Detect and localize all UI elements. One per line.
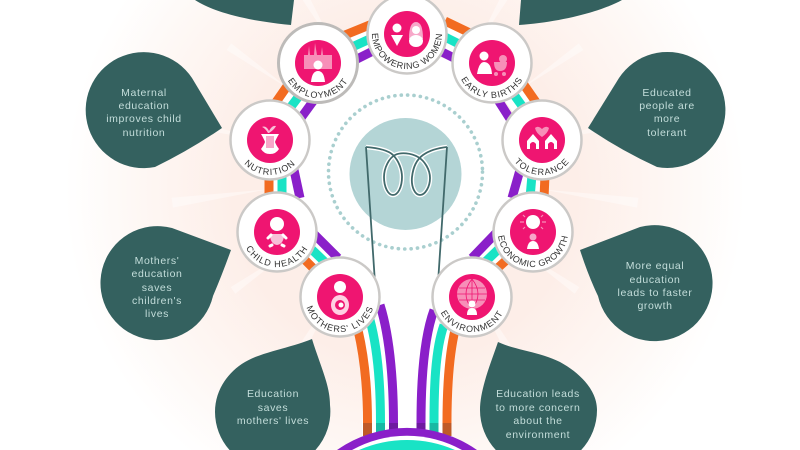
icon: coin and person: [520, 215, 546, 249]
callout: faster growth: growth: [637, 300, 673, 312]
callout: faster growth: [580, 225, 713, 341]
dotted ring: [328, 95, 482, 249]
icon: pregnant mother: [331, 281, 349, 315]
node: tolerance: TOLERANCE: [516, 158, 569, 175]
callout: child nutrition: nutrition: [123, 127, 165, 139]
callout: child nutrition: education: [119, 100, 169, 112]
callout: saves mothers: Education: [247, 388, 299, 400]
callout: environment: to more concern: [496, 402, 580, 414]
node: empowering women: EMPOWERING WOMEN: [372, 34, 442, 70]
node: early births: [451, 22, 533, 104]
callout: tolerant: Educated: [642, 87, 692, 99]
node: early births: EARLY BIRTHS: [461, 76, 522, 98]
stems: [358, 305, 455, 436]
icon: women: [391, 22, 423, 47]
node: empowering women: [366, 0, 448, 75]
callout: saves children: children's: [132, 295, 182, 307]
callout: top right (cropped): [519, 0, 622, 25]
callout: saves children: Mothers': [135, 255, 179, 267]
icon: globe and person: [457, 279, 487, 315]
ribbon connectors between nodes: [269, 21, 545, 275]
callout: tolerant: more: [654, 113, 680, 125]
callout: faster growth: leads to faster: [618, 287, 692, 299]
callout: tolerant: [588, 52, 725, 168]
callout: saves children: lives: [145, 308, 169, 320]
node: nutrition: NUTRITION: [244, 160, 295, 175]
filament wires: [366, 147, 447, 283]
callout: saves children: [100, 226, 231, 340]
callout: environment: Education leads: [496, 388, 580, 400]
node: environment: [431, 256, 513, 338]
callout: saves children: education: [132, 268, 182, 280]
icon: houses and heart: [527, 127, 557, 149]
callout: child nutrition: [86, 52, 222, 168]
node: mothers' lives: [299, 256, 381, 338]
callout: tolerant: people are: [639, 100, 695, 112]
callout: saves mothers: mothers' lives: [237, 415, 309, 427]
node: mothers' lives: MOTHERS' LIVES: [306, 306, 372, 332]
icon: factory and worker: [304, 43, 332, 82]
node: nutrition: [229, 99, 311, 181]
base dome: [337, 428, 477, 450]
callout: faster growth: education: [630, 274, 680, 286]
node: child health: [236, 191, 318, 273]
callout: saves children: saves: [142, 282, 172, 294]
white bulb interior: [285, 52, 525, 450]
callout: tolerant: tolerant: [647, 127, 687, 139]
callout: child nutrition: improves child: [106, 113, 182, 125]
callout: saves mothers: [215, 339, 330, 450]
callout: faster growth: More equal: [626, 260, 684, 272]
node: employment: EMPLOYMENT: [288, 78, 346, 98]
icon: mother and pram: [477, 52, 507, 76]
callout: child nutrition: Maternal: [121, 87, 167, 99]
icon: baby: [268, 217, 286, 246]
central teal circle: [350, 118, 462, 230]
node: economic growth: ECONOMIC GROWTH: [498, 235, 568, 268]
node: tolerance: [501, 99, 583, 181]
callout: environment: about the: [513, 415, 563, 427]
node: economic growth: [492, 191, 574, 273]
node: child health: CHILD HEALTH: [247, 246, 308, 268]
icon: apple core: [261, 126, 279, 154]
node: employment: [277, 22, 359, 104]
callout: saves mothers: saves: [258, 402, 288, 414]
callout: environment: environment: [506, 429, 570, 441]
node: environment: ENVIRONMENT: [440, 310, 502, 332]
callout: top left (cropped): [195, 0, 294, 25]
callout: environment: [480, 342, 597, 450]
